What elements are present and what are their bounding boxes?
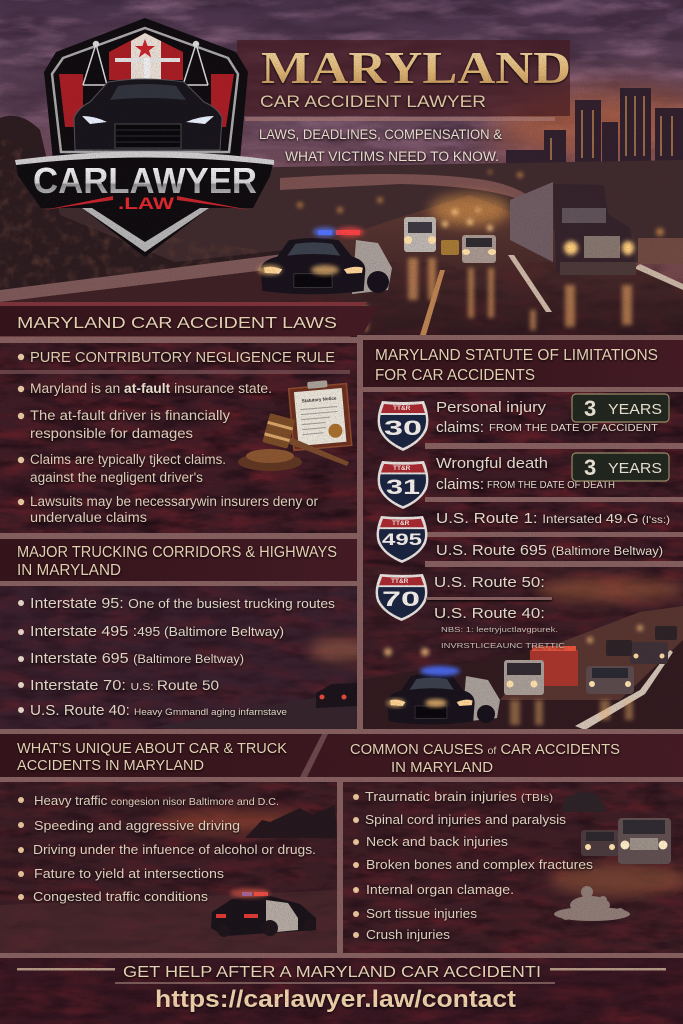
subtitle: CAR ACCIDENT LAWYER (260, 92, 486, 111)
bullets (18, 354, 24, 505)
right column: statute of limitations (363, 335, 683, 730)
icon: clipboard document (288, 379, 352, 450)
corridors text list: Interstate 70: U.S: Route 50 (30, 678, 219, 694)
heading: common causes: COMMON CAUSES of CAR ACCIDENTS (350, 742, 620, 758)
tagline: WHAT VICTIMS NEED TO KNOW. (285, 149, 499, 164)
logo: CarLawyer.law shield (15, 18, 274, 257)
icon: scales of justice (83, 42, 208, 85)
icon: interstate 70: 70 (382, 588, 420, 611)
row: wrongful death: claims: (436, 476, 484, 493)
heading: statute of limitations: MARYLAND STATUTE OF LIMITATIONS (375, 347, 658, 364)
icon: semi truck (510, 182, 636, 275)
heading: what's unique: WHAT'S UNIQUE ABOUT CAR & TRUCK (17, 741, 287, 757)
panel: corridors list (0, 586, 370, 729)
icon: interstate 495: TT&R (392, 520, 410, 527)
hero scene: city skyline and highway (0, 0, 683, 340)
unique factors list (33, 793, 316, 904)
icon: interstate 495: 495 (382, 530, 422, 549)
icon: interstate 31: TT&R (393, 465, 411, 472)
unique factors list: Speeding and aggressive driving (34, 818, 240, 833)
row: personal injury: Personal injury (436, 399, 547, 416)
panel: statute heading (363, 340, 683, 387)
bullets (18, 797, 24, 900)
icon: clipboard document: Statutory Notice (301, 395, 337, 404)
row: wrongful death (436, 455, 615, 493)
panel: unique factors (0, 782, 337, 953)
rule text list: responsible for damages (30, 426, 193, 441)
badge: 3 years (572, 394, 669, 422)
corridors text list: U.S. Route 40: Heavy Gmmandl aging infarnstave (30, 703, 287, 719)
rule text list: The at-fault driver is financially (30, 408, 230, 423)
badge: 3 years: YEARS (608, 401, 662, 418)
row: U.S. route 695: U.S. Route 695 (Baltimore Beltway) (436, 543, 663, 559)
rule text list (30, 381, 319, 525)
row: U.S. route 1: U.S. Route 1: Intersated 49.G (I'ss:) (436, 511, 670, 527)
badge: 3 years: 3 (584, 396, 596, 421)
panel: contributory negligence rule (0, 343, 357, 533)
panel: statute rows (363, 392, 683, 570)
rule text list: undervalue claims (30, 510, 147, 525)
icon: red rescue truck (504, 646, 578, 695)
corridors text list: Interstate 695 (Baltimore Beltway) (30, 651, 244, 667)
panel: common causes (343, 782, 683, 953)
heading: trucking corridors (17, 544, 337, 579)
corridors text list: Interstate 95: One of the busiest trucking routes (30, 596, 335, 612)
row: personal injury: claims: (436, 419, 484, 436)
heading: statute of limitations (375, 347, 658, 384)
routes 50 and 40: U.S. Route 50: (434, 575, 545, 591)
causes list: Sort tissue injuries (366, 906, 478, 921)
icon: interstate 70 (376, 574, 427, 621)
causes list: Spinal cord injuries and paralysis (365, 812, 567, 827)
logo banner (15, 152, 274, 165)
contact URL: https://carlawyer.law/contact (155, 986, 516, 1013)
title text block (259, 42, 571, 164)
subheading: PURE CONTRIBUTORY NEGLIGENCE RULE (30, 350, 335, 366)
heading: what's unique: ACCIDENTS IN MARYLAND (17, 758, 204, 774)
small note text: NBS: 1: leetryjuctlavgpurek. (441, 625, 558, 634)
corridors text list: Interstate 495 : 495 (Baltimore Beltway) (30, 624, 284, 640)
row: wrongful death: Wrongful death (436, 455, 548, 472)
panel: trucking corridors heading (0, 539, 357, 581)
row: wrongful death: FROM THE DATE OF DEATH (487, 480, 615, 491)
icon: police car in hero (258, 227, 392, 294)
heading: common causes: IN MARYLAND (391, 760, 493, 776)
row: personal injury (436, 399, 659, 436)
panel: laws heading (0, 306, 379, 336)
icon: interstate 31 (378, 461, 428, 509)
causes list: Neck and back injuries (366, 834, 509, 849)
heading: statute of limitations: FOR CAR ACCIDENTS (375, 367, 535, 384)
heading: trucking corridors: MAJOR TRUCKING CORRIDORS & HIGHWAYS (17, 544, 337, 561)
icon: police car (387, 666, 500, 724)
routes 50 and 40: U.S. Route 40: (434, 606, 545, 622)
title block background (237, 40, 570, 116)
causes list: Internal organ clamage. (366, 882, 514, 897)
unique factors list: Heavy traffic congesion nisor Baltimore and D.C. (34, 793, 279, 808)
logo domain: .LAW (118, 194, 175, 213)
icon: interstate 30 (378, 401, 428, 451)
causes list (365, 789, 594, 942)
routes 50 and 40 (427, 575, 552, 622)
rule text list: Claims are typically tjkect claims. (30, 452, 226, 467)
icon: star (135, 39, 155, 58)
heading: common causes (350, 742, 620, 776)
unique factors list: Congested traffic conditions (33, 889, 209, 904)
rule text list: Lawsuits may be necessarywin insurers deny or (30, 494, 319, 509)
icon: pickup truck (581, 818, 671, 864)
icon: interstate 30: 30 (384, 417, 422, 440)
causes list: Broken bones and complex fractures (366, 857, 594, 872)
tagline: LAWS, DEADLINES, COMPENSATION & (259, 127, 502, 142)
rule text list: Maryland is an at-fault insurance state. (30, 381, 272, 396)
tagline (259, 127, 502, 164)
bullets (18, 600, 24, 713)
panel: highway scene (363, 567, 683, 730)
icon: traffic on highway (404, 208, 496, 263)
bottom headings band (0, 734, 683, 777)
call to action text: GET HELP AFTER A MARYLAND CAR ACCIDENTI (123, 964, 541, 981)
icon: gavel (238, 413, 349, 471)
badge: 3 years (572, 453, 669, 481)
heading: what's unique (17, 741, 287, 774)
icon: rubble pile (554, 886, 630, 921)
corridors text list (30, 596, 335, 719)
heading: Maryland car accident laws: MARYLAND CAR ACCIDENT LAWS (17, 315, 337, 332)
icon: dark sedan (316, 683, 357, 708)
main title: MARYLAND (261, 42, 571, 93)
left column panels (0, 306, 379, 729)
icon: interstate 31: 31 (386, 476, 420, 499)
icon: police car rear (211, 888, 316, 937)
row: personal injury: FROM THE DATE OF ACCIDENT (489, 422, 659, 434)
vertical divider (357, 335, 363, 730)
logo name: CARLAWYER (33, 160, 257, 201)
icon: interstate 30: TT&R (393, 405, 411, 412)
icon: wrecked car (562, 792, 605, 812)
band under hero (0, 302, 368, 306)
highway shields (376, 401, 428, 621)
icon: interstate 495 (377, 516, 427, 563)
heading: trucking corridors: IN MARYLAND (17, 562, 121, 579)
small note text: INVRSTLICEAUNC TRETTIC (441, 641, 566, 650)
icon: interstate 70: TT&R (391, 578, 409, 585)
causes list: Crush injuries (366, 927, 451, 942)
badge: 3 years: YEARS (608, 460, 662, 477)
bullets (353, 794, 359, 938)
badge: 3 years: 3 (584, 455, 596, 480)
causes list: Traurnatic brain injuries (TBIs) (365, 789, 553, 804)
icon: car front (74, 79, 222, 150)
small note text (441, 625, 566, 650)
unique factors list: Driving under the infuence of alcohol or drugs. (33, 842, 316, 857)
panel: footer call to action (0, 958, 683, 1024)
unique factors list: Fature to yield at intersections (34, 866, 225, 881)
rule text list: against the negligent driver's (30, 470, 203, 485)
icon: civilian cars (586, 626, 677, 694)
